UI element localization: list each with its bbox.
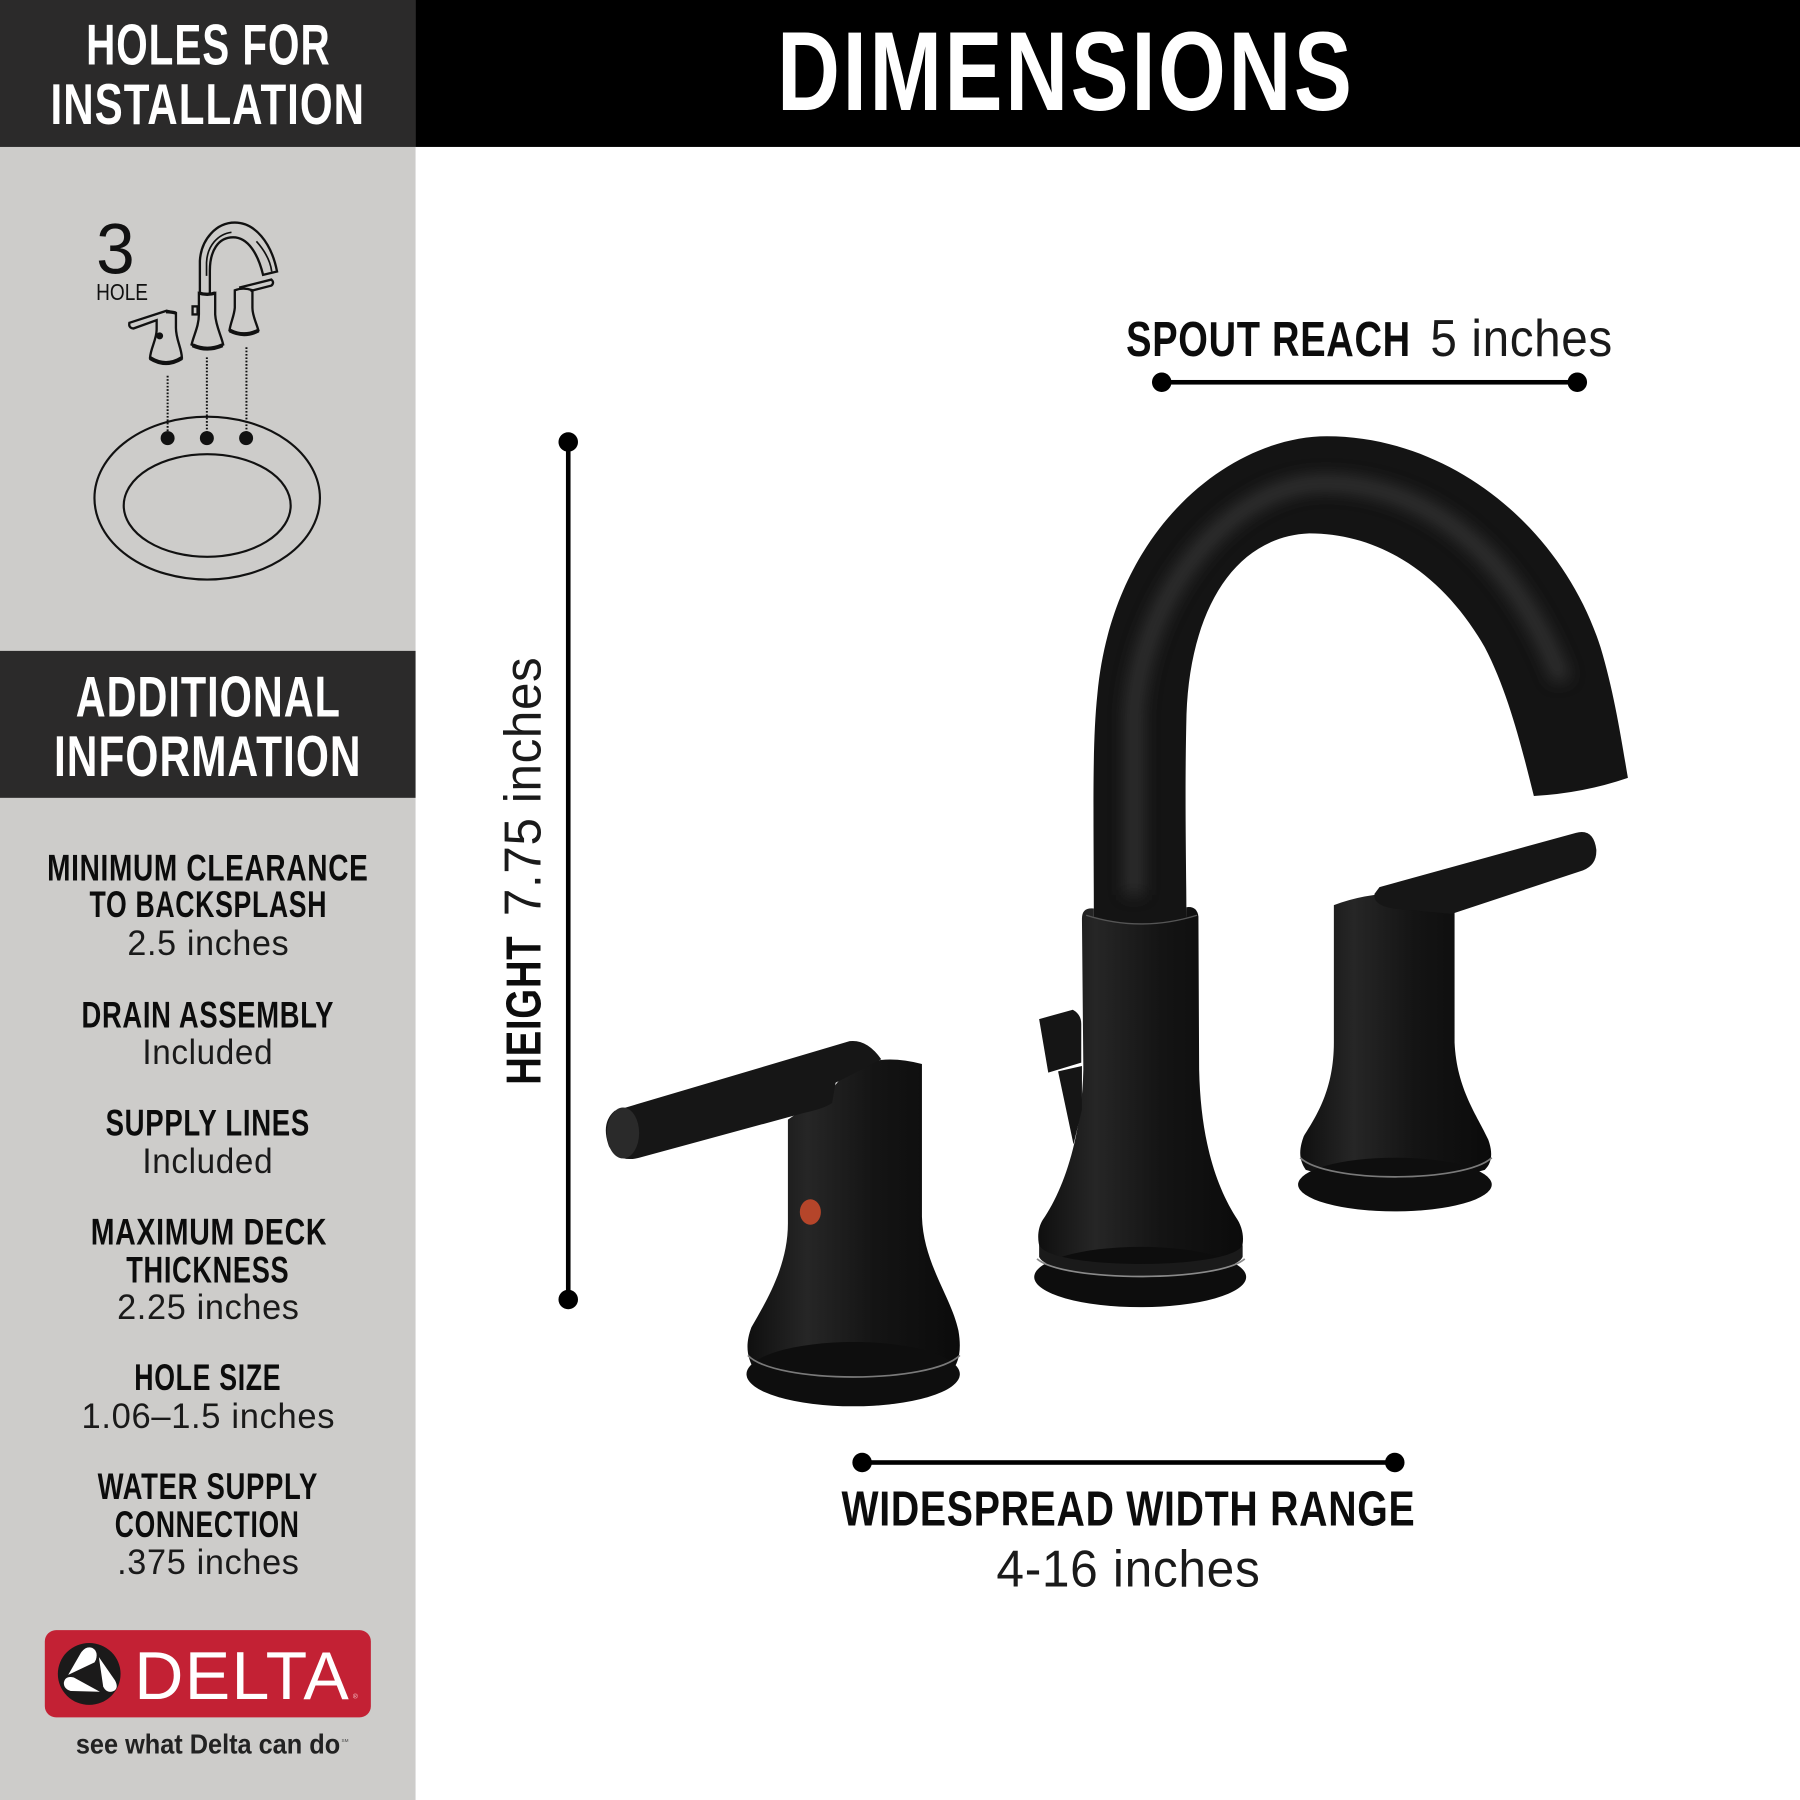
info: minimum clearance: 2.5 inches: [127, 923, 289, 963]
heading: additional information: [0, 651, 416, 798]
info: hole size: [82, 1357, 335, 1436]
spout reach label: SPOUT REACH: [1126, 312, 1411, 367]
logo black circle: [58, 1643, 121, 1705]
info: maximum deck thickness: MAXIMUM DECK: [91, 1211, 327, 1252]
height label: 7.75 inches: [494, 657, 552, 916]
dimension: widespread width range: [841, 1453, 1415, 1597]
drain pop-up lever: [1039, 1010, 1082, 1144]
logo service mark: SM: [341, 1738, 349, 1743]
spout reach label: 5 inches: [1430, 309, 1613, 367]
info: water supply connection: CONNECTION: [115, 1504, 300, 1545]
info: maximum deck thickness: [91, 1211, 327, 1327]
left sidebar panel: [0, 0, 416, 1800]
width range label: [841, 1482, 1415, 1597]
logo registered mark: ®: [353, 1692, 358, 1700]
info: drain assembly: [82, 994, 334, 1072]
info: water supply connection: [98, 1466, 318, 1582]
height label: [494, 657, 552, 1085]
width range label: WIDESPREAD WIDTH RANGE: [841, 1482, 1415, 1537]
icon label: 3 hole: [96, 209, 148, 305]
info: water supply connection: WATER SUPPLY: [98, 1466, 318, 1507]
height line: [558, 432, 578, 1309]
right handle: [1298, 832, 1596, 1211]
logo red badge: [45, 1630, 371, 1717]
faucet photo: [606, 436, 1628, 1406]
faucet center base: [1034, 1245, 1246, 1307]
logo: delta: [45, 1630, 371, 1759]
heading: holes for installation: [0, 0, 416, 147]
title: dimensions: [416, 0, 1800, 147]
info: hole size: HOLE SIZE: [134, 1357, 281, 1398]
heading: additional information: ADDITIONAL: [76, 665, 341, 729]
dimension: spout reach: [1126, 309, 1613, 392]
icon: three hole faucet and sink diagram: [94, 209, 320, 580]
info: drain assembly: Included: [142, 1032, 273, 1072]
info: supply lines: SUPPLY LINES: [106, 1102, 310, 1143]
info: minimum clearance: [47, 847, 368, 963]
spout reach line: [1152, 373, 1587, 392]
hot indicator dot: [800, 1199, 821, 1225]
info: minimum clearance: MINIMUM CLEARANCE: [47, 847, 368, 888]
logo wordmark: DELTA: [134, 1638, 350, 1714]
heading: holes for installation: HOLES FOR: [86, 13, 331, 77]
icon: sink bowl: [94, 417, 320, 580]
left handle: [606, 1041, 960, 1406]
icon: three holes: [161, 431, 253, 445]
info: water supply connection: .375 inches: [117, 1542, 300, 1582]
info: minimum clearance: TO BACKSPLASH: [90, 884, 327, 925]
width range line: [852, 1453, 1405, 1472]
icon: line drawn spout: [129, 223, 277, 363]
faucet spout: [1093, 436, 1628, 935]
icon label: 3 hole: 3: [96, 209, 135, 289]
heading: holes for installation: INSTALLATION: [51, 73, 365, 137]
icon label: 3 hole: HOLE: [96, 279, 148, 305]
logo tagline: see what Delta can do: [76, 1727, 340, 1759]
icon: dotted hole guides: [168, 347, 246, 432]
info: supply lines: [106, 1102, 310, 1181]
title: dimensions: DIMENSIONS: [777, 8, 1355, 134]
info: supply lines: Included: [142, 1141, 273, 1181]
width range label: 4-16 inches: [996, 1539, 1260, 1597]
dimension: height: [494, 432, 578, 1309]
heading: additional information: INFORMATION: [54, 725, 362, 789]
faucet center body: [1038, 907, 1243, 1270]
info: hole size: 1.06–1.5 inches: [82, 1396, 335, 1436]
info: drain assembly: DRAIN ASSEMBLY: [82, 994, 334, 1035]
logo white triangle drops: [64, 1647, 117, 1692]
info: maximum deck thickness: 2.25 inches: [117, 1287, 300, 1327]
info: maximum deck thickness: THICKNESS: [126, 1249, 289, 1290]
height label: HEIGHT: [497, 936, 552, 1085]
